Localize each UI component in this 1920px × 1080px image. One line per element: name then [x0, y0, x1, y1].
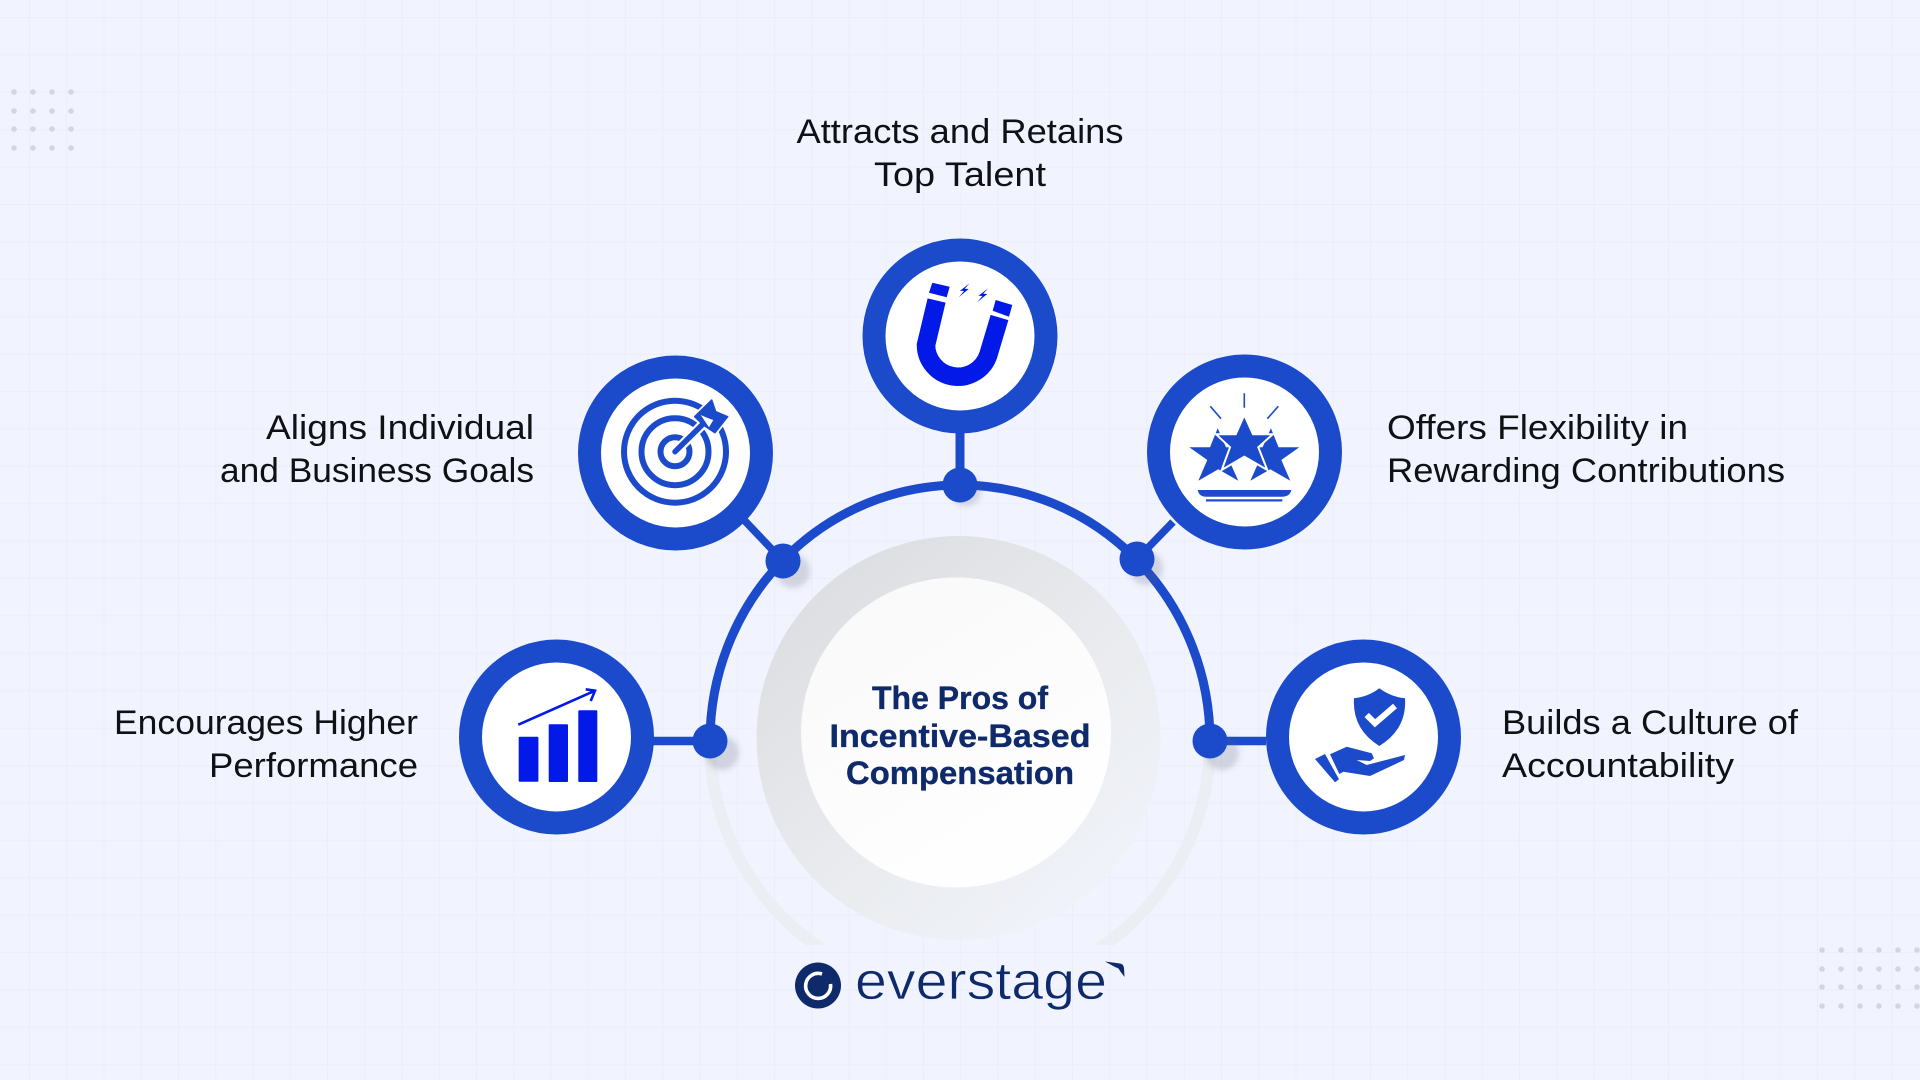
icon: shield over open hand [1315, 688, 1405, 782]
label: encourages higher performance [114, 704, 418, 785]
logo: everstage [795, 952, 1124, 1011]
soft lower arc shadow [704, 758, 1215, 945]
label: aligns individual and business goals [220, 409, 534, 490]
centre disc with title [756, 536, 1160, 940]
label: builds a culture of accountability: Builds a Culture of [1502, 704, 1799, 742]
label: attracts and retains top talent: Attracts and Retains [796, 113, 1124, 151]
icon badge: stars [1158, 366, 1330, 538]
label: offers flexibility in rewarding contributions: Rewarding Contributions [1387, 452, 1785, 490]
centre title: Incentive-Based [830, 718, 1090, 754]
decorative dots: top left [11, 89, 74, 151]
label: encourages higher performance: Performance [209, 747, 418, 785]
centre title: The Pros of [872, 680, 1048, 716]
label: attracts and retains top talent [796, 113, 1124, 194]
icon badge: magnet [874, 250, 1046, 422]
icon: rising bars with arrow [518, 689, 597, 782]
label: encourages higher performance: Encourages Higher [114, 704, 418, 742]
icon: three stars on a stand [1189, 393, 1299, 502]
centre title [830, 680, 1090, 791]
label: aligns individual and business goals: and Business Goals [220, 452, 534, 490]
label: builds a culture of accountability: Accountability [1502, 747, 1734, 785]
label: aligns individual and business goals: Aligns Individual [266, 409, 534, 447]
decorative dots: bottom right [1819, 947, 1920, 1009]
icon badge: target [590, 367, 762, 539]
icon badge: bar chart [470, 651, 642, 823]
centre title: Compensation [846, 755, 1074, 791]
grey ring [756, 536, 1160, 940]
label: offers flexibility in rewarding contributions: Offers Flexibility in [1387, 409, 1688, 447]
logo wordmark: everstage [855, 952, 1107, 1011]
white disc [801, 578, 1111, 888]
label: attracts and retains top talent: Top Talent [874, 156, 1047, 194]
icon badge: shield and hand [1278, 651, 1450, 823]
logo corner mark [1105, 962, 1124, 977]
node shadows [705, 476, 1239, 770]
icon: magnet [926, 283, 1012, 377]
connector arc and spokes [653, 433, 1266, 741]
label: builds a culture of accountability [1502, 704, 1799, 785]
logo mark [795, 962, 841, 1008]
label: offers flexibility in rewarding contributions [1387, 409, 1785, 490]
icon: target and arrow [624, 400, 728, 503]
connector nodes [692, 468, 1228, 758]
